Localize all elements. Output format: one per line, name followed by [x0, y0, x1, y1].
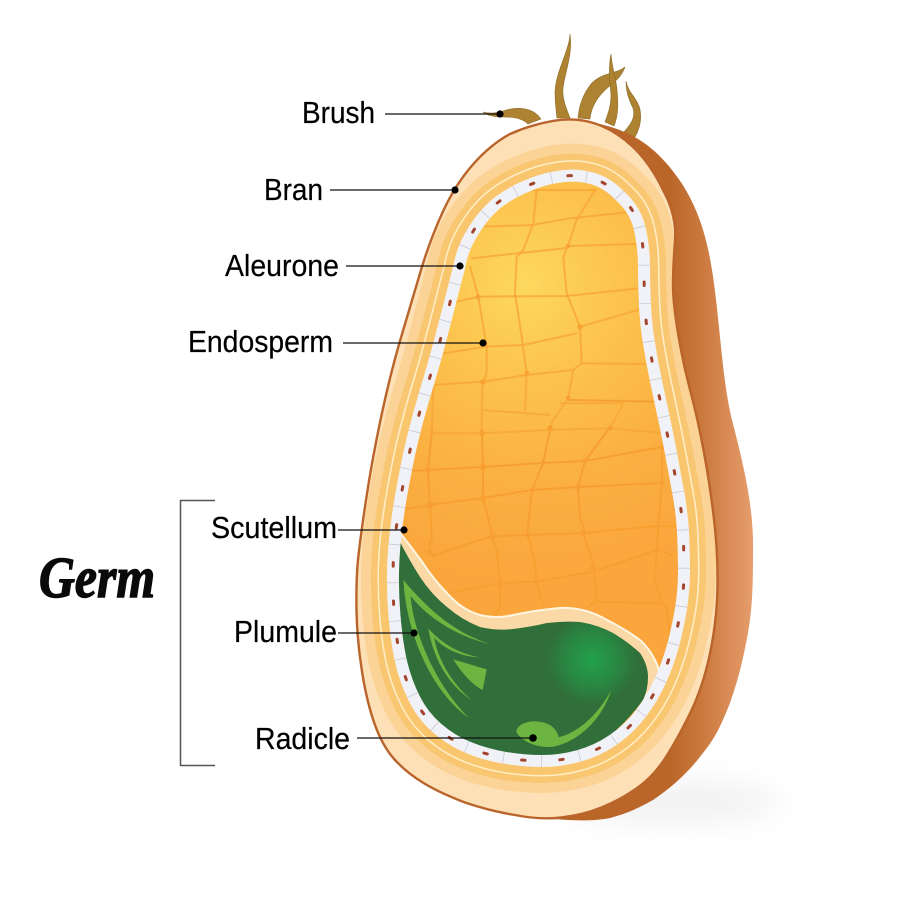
label: brush	[302, 95, 504, 130]
plumule	[403, 580, 611, 747]
label: scutellum: Scutellum	[211, 510, 337, 545]
label: plumule: Plumule	[234, 614, 337, 649]
scutellum band	[396, 528, 659, 700]
label: brush: Brush	[302, 95, 375, 130]
label: bran: Bran	[264, 172, 323, 207]
label: aleurone	[225, 248, 464, 283]
germ heading: Germ	[39, 545, 155, 610]
label: bran	[264, 172, 459, 207]
label: scutellum	[211, 510, 408, 545]
cell wall junctions	[425, 244, 665, 586]
cell walls, middle	[405, 430, 662, 540]
radicle	[516, 691, 611, 747]
bracket	[180, 500, 215, 766]
hairs: brush	[483, 34, 641, 137]
label: endosperm: Endosperm	[188, 324, 333, 359]
aleurone layer	[393, 176, 684, 761]
label: radicle	[255, 721, 537, 756]
cell walls, upper	[432, 190, 663, 433]
label: endosperm	[188, 324, 487, 359]
drop shadow	[560, 780, 780, 824]
label: aleurone: Aleurone	[225, 248, 339, 283]
back skin of the grain	[555, 122, 753, 820]
label: plumule	[234, 614, 418, 649]
germ: embryo	[396, 538, 648, 757]
endosperm	[402, 182, 678, 730]
cell walls, lower	[422, 525, 676, 638]
grain illustration	[356, 34, 753, 820]
bran: cut face	[356, 119, 718, 818]
label: radicle: Radicle	[255, 721, 350, 756]
